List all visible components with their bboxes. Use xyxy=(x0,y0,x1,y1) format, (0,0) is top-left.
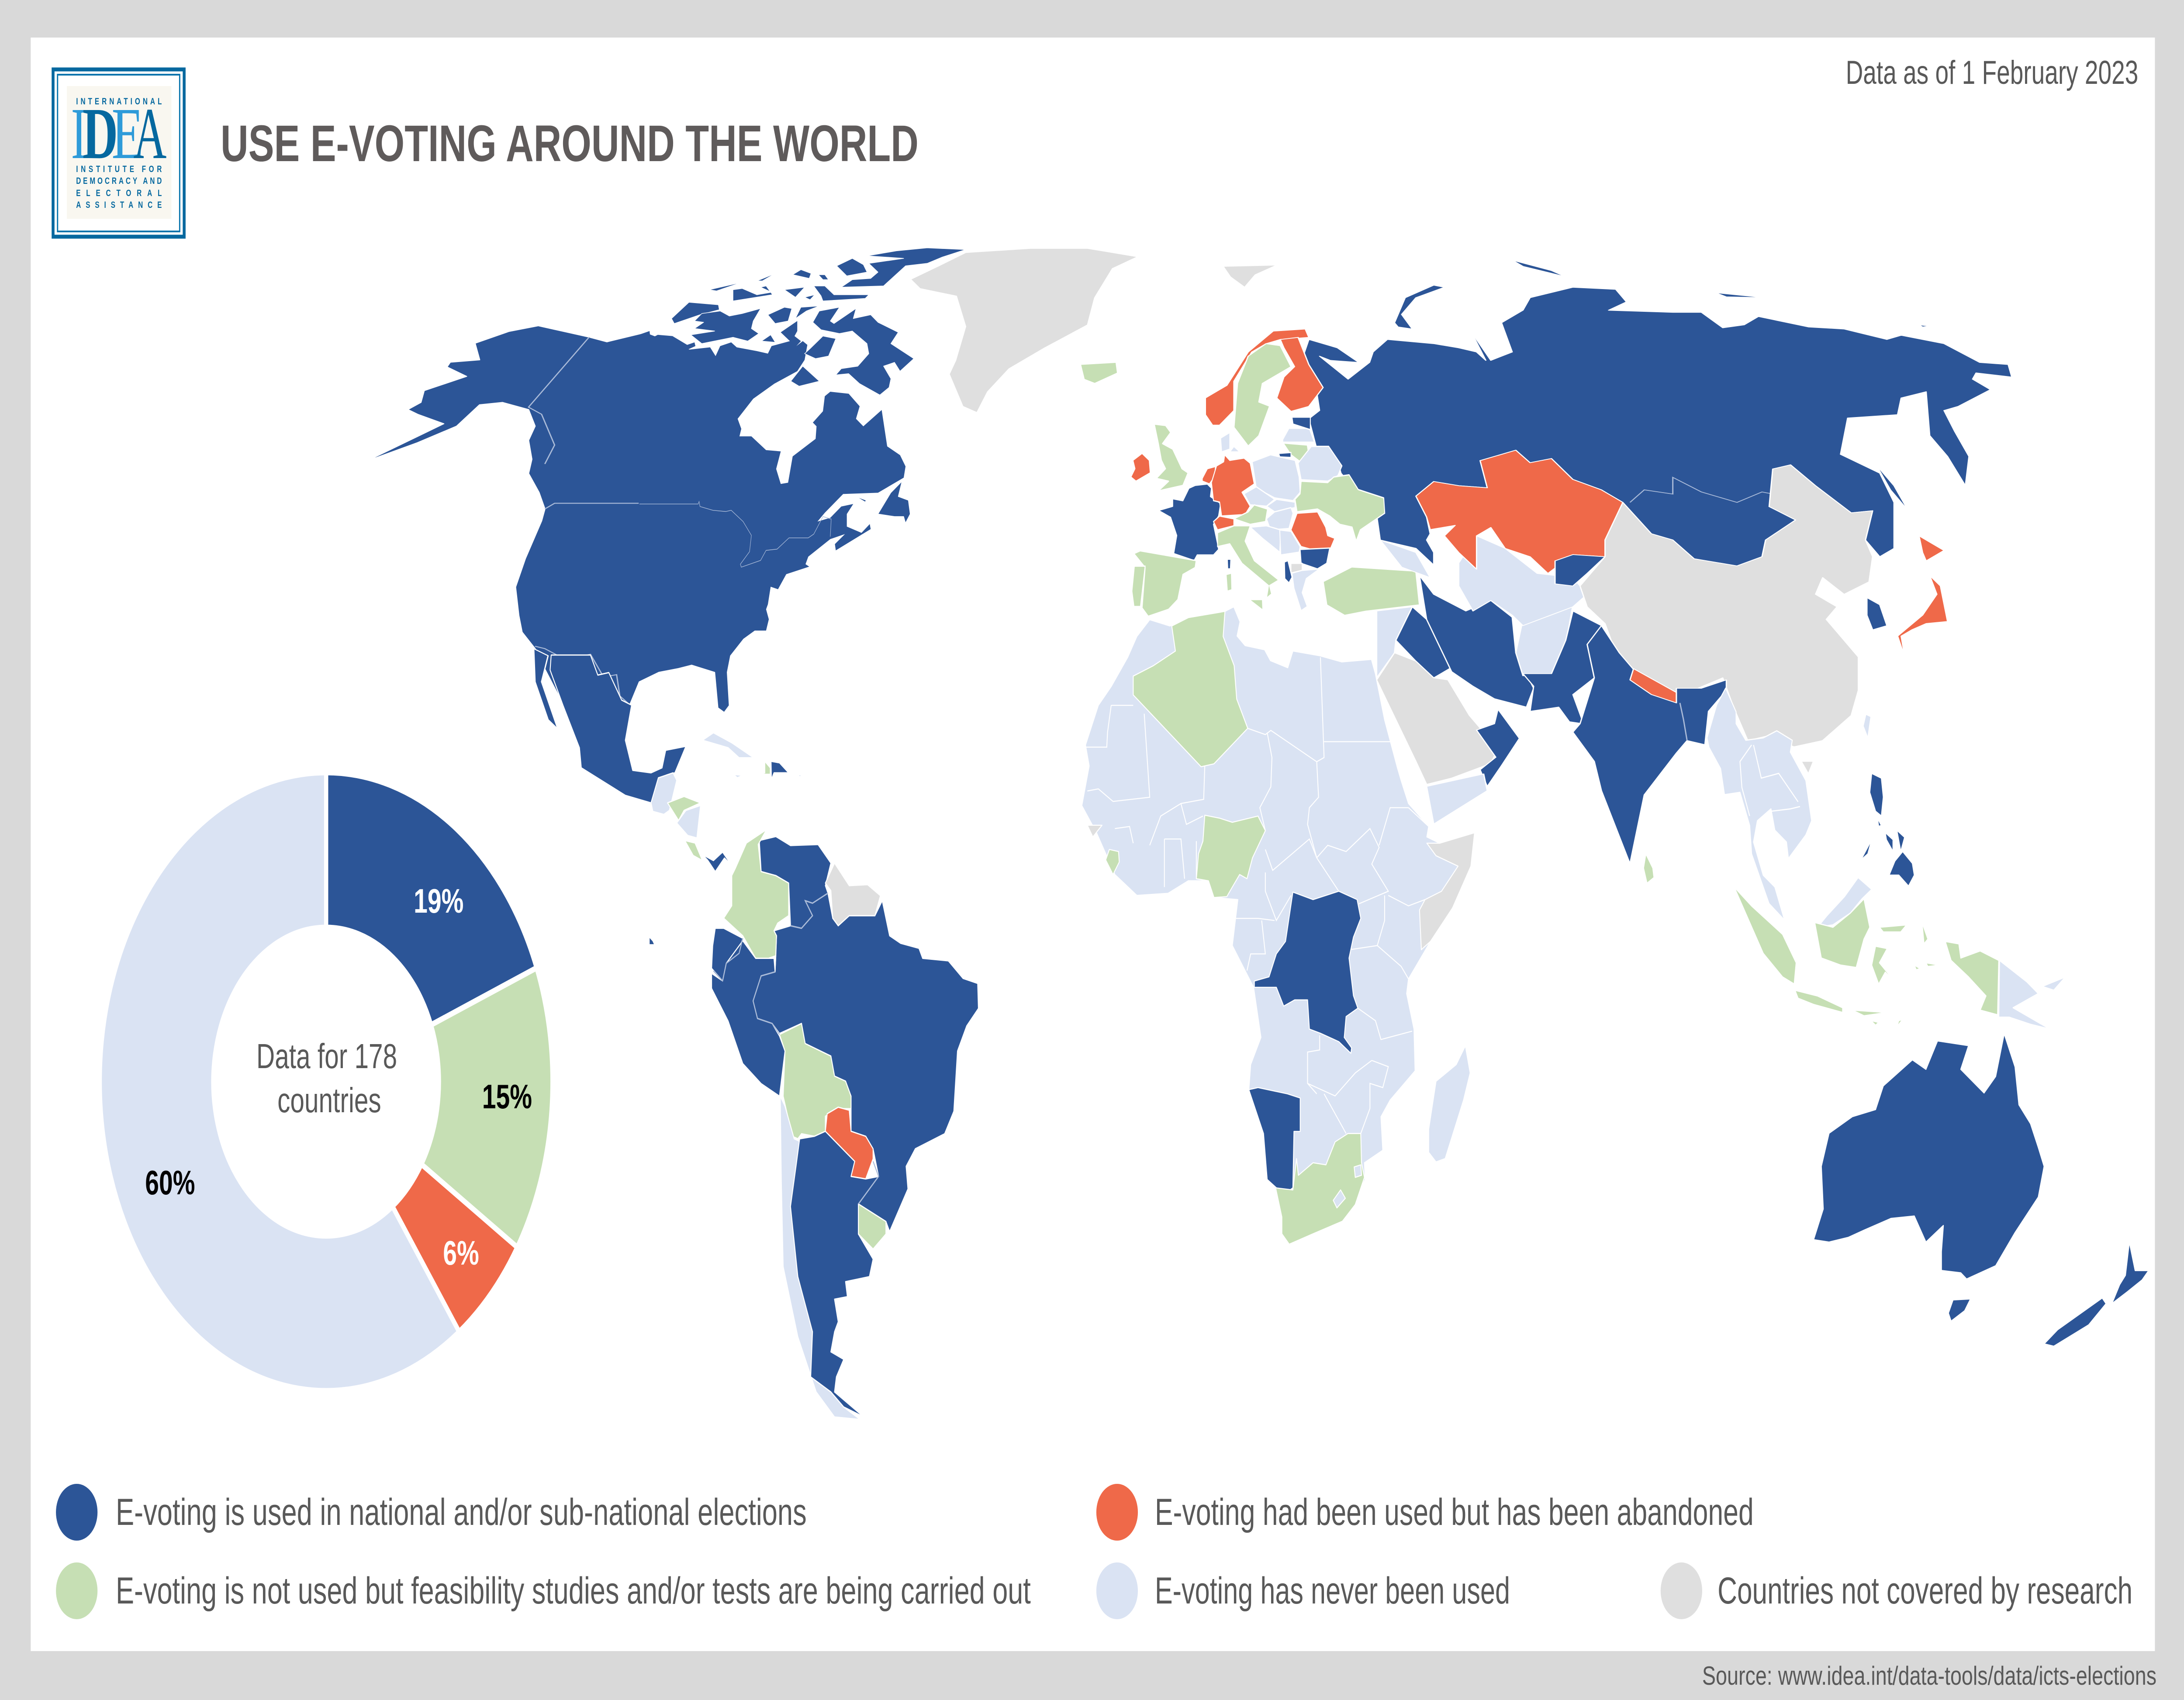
legend: used xyxy=(56,1484,807,1541)
data date note: Data as of 1 February 2023 xyxy=(1846,55,2138,91)
legend xyxy=(56,1484,2132,1619)
legend: feasibility xyxy=(56,1562,1031,1619)
Africa xyxy=(1082,607,1475,1244)
logo: International IDEA: ASSISTANCE xyxy=(76,200,162,210)
legend: not covered: Countries not covered by research xyxy=(1717,1569,2132,1611)
logo: International IDEA: INTERNATIONAL xyxy=(76,96,162,107)
legend: used: E-voting is used in national and/or sub-national elections xyxy=(116,1491,807,1533)
donut segment: never used 60% xyxy=(100,772,459,1391)
label 15%: 15% xyxy=(482,1078,532,1116)
logo: International IDEA: I xyxy=(71,93,87,174)
donut centre text: countries xyxy=(277,1081,381,1120)
label 19%: 19% xyxy=(414,882,463,920)
title: USE E-VOTING AROUND THE WORLD xyxy=(221,114,919,172)
label 6%: 6% xyxy=(443,1234,479,1272)
logo: International IDEA: D xyxy=(83,93,118,174)
logo: International IDEA: INSTITUTE FOR xyxy=(76,164,162,174)
logo: International IDEA: A xyxy=(133,93,166,174)
Latin America xyxy=(550,655,978,1420)
source note: Source: www.idea.int/data-tools/data/icts-elections xyxy=(1702,1661,2156,1691)
donut segment: abandoned 6% xyxy=(392,1164,517,1332)
donut segment: e-voting used 19% xyxy=(326,772,536,1025)
legend: not covered xyxy=(1661,1562,2132,1619)
donut chart xyxy=(100,772,553,1391)
North America west and south xyxy=(372,326,764,729)
logo: International IDEA xyxy=(53,69,184,237)
Greenland, Russia and Asia xyxy=(911,248,2012,864)
legend: feasibility: E-voting is not used but feasibility studies and/or tests are being carried out xyxy=(116,1569,1031,1611)
donut segment: feasibility studies 15% xyxy=(422,968,553,1247)
Europe xyxy=(1131,417,1385,616)
legend: never used xyxy=(1096,1562,1510,1619)
Eastern Canada and Arctic islands xyxy=(639,248,966,631)
legend: never used: E-voting has never been used xyxy=(1155,1569,1510,1611)
logo: International IDEA: ELECTORAL xyxy=(76,188,162,198)
world map xyxy=(372,248,2149,1420)
legend: abandoned: E-voting had been used but has been abandoned xyxy=(1155,1491,1754,1533)
donut centre text: Data for 178 xyxy=(256,1037,397,1076)
legend: abandoned xyxy=(1096,1484,1754,1541)
logo: International IDEA: DEMOCRACY AND xyxy=(76,176,162,186)
label 60%: 60% xyxy=(145,1164,195,1202)
South-East Asia and Oceania xyxy=(1644,688,2149,1346)
logo: International IDEA: E xyxy=(111,93,144,174)
